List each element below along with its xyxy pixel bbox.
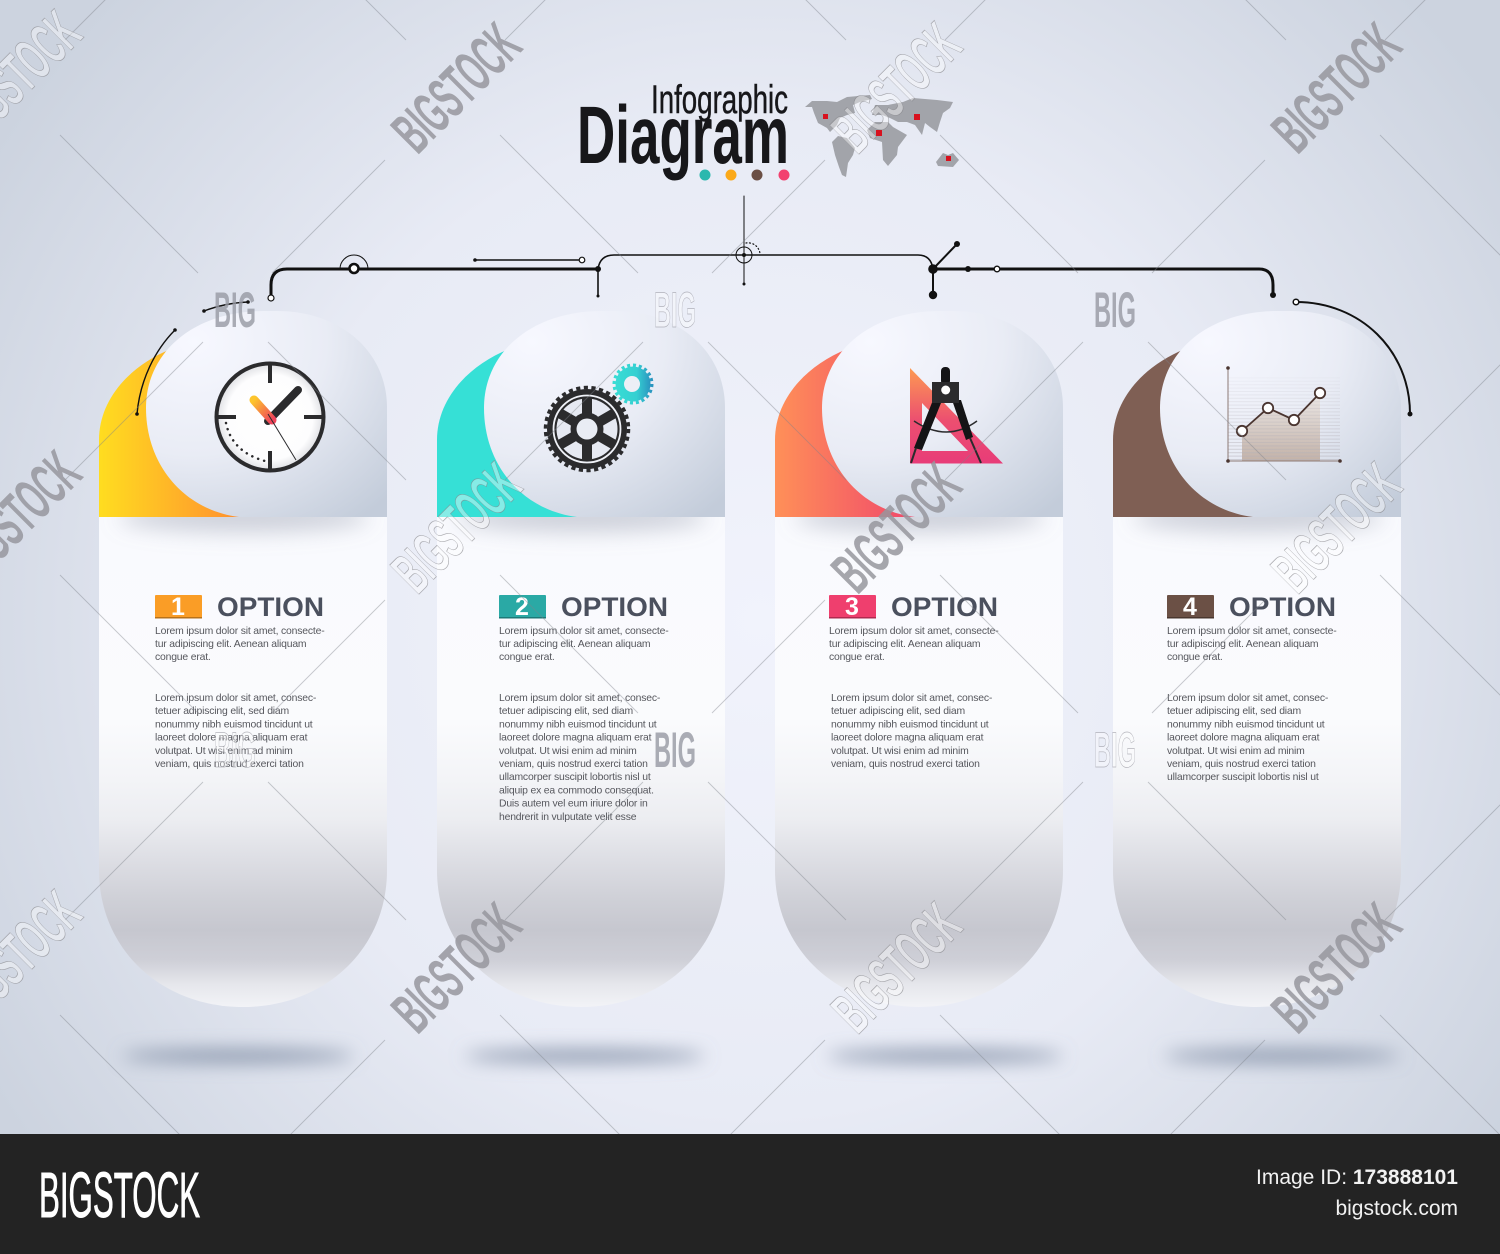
icon: set square and compass bbox=[910, 367, 1003, 464]
option 2 text: nonummy nibh euismod tincidunt ut bbox=[499, 719, 657, 730]
panel: option 3 bbox=[775, 311, 1063, 1007]
option 3 text: nonummy nibh euismod tincidunt ut bbox=[831, 719, 989, 730]
option 4 text: nonummy nibh euismod tincidunt ut bbox=[1167, 719, 1325, 730]
option 4 text: ullamcorper suscipit lobortis nisl ut bbox=[1167, 772, 1319, 783]
icon: clock bbox=[216, 364, 324, 470]
icon: gears bbox=[546, 366, 652, 470]
option 2 text: Lorem ipsum dolor sit amet, consec- bbox=[499, 693, 660, 704]
option 4 text: tetuer adipiscing elit, sed diam bbox=[1167, 706, 1301, 717]
title: Diagram bbox=[577, 90, 789, 181]
option 2 text: laoreet dolore magna aliquam erat bbox=[499, 733, 652, 744]
option 2 text: ullamcorper suscipit lobortis nisl ut bbox=[499, 772, 651, 783]
watermark text: BIG bbox=[214, 722, 256, 778]
option 1 text: Lorem ipsum dolor sit amet, consec- bbox=[155, 693, 316, 704]
footer band: bigstock.com bbox=[1335, 1197, 1458, 1220]
option 1 text: tur adipiscing elit. Aenean aliquam bbox=[155, 639, 306, 650]
option 2 text: tur adipiscing elit. Aenean aliquam bbox=[499, 639, 650, 650]
option 1 text: nonummy nibh euismod tincidunt ut bbox=[155, 719, 313, 730]
option 1 text bbox=[155, 592, 324, 770]
option 3 text: Lorem ipsum dolor sit amet, consecte- bbox=[829, 626, 998, 637]
panel: option 1 bbox=[99, 311, 387, 1007]
option 2 text: 2 bbox=[515, 593, 529, 621]
option 2 text: hendrerit in vulputate velit esse bbox=[499, 812, 637, 823]
option 1 text: veniam, quis nostrud exerci tation bbox=[155, 759, 304, 770]
watermark text bbox=[0, 0, 1413, 1045]
option 3 text: OPTION bbox=[891, 592, 998, 622]
option 1 text: OPTION bbox=[217, 592, 324, 622]
option 3 text: volutpat. Ut wisi enim ad minim bbox=[831, 746, 969, 757]
option 1 text: congue erat. bbox=[155, 652, 211, 663]
watermark text: BIGSTOCK bbox=[819, 451, 973, 605]
option 2 text bbox=[499, 592, 668, 823]
option 4 text: laoreet dolore magna aliquam erat bbox=[1167, 733, 1320, 744]
watermark text: BIG bbox=[1094, 722, 1136, 778]
option 1 text: laoreet dolore magna aliquam erat bbox=[155, 733, 308, 744]
option 2 text: Duis autem vel eum iriure dolor in bbox=[499, 799, 648, 810]
option 2 text: aliquip ex ea commodo consequat. bbox=[499, 785, 654, 796]
footer band: BIGSTOCK bbox=[39, 1159, 200, 1231]
watermark text: BIGSTOCK bbox=[379, 891, 533, 1045]
watermark text: BIGSTOCK bbox=[379, 451, 533, 605]
option 4 text: Lorem ipsum dolor sit amet, consec- bbox=[1167, 693, 1328, 704]
panel: option 4 bbox=[1113, 311, 1401, 1007]
option 1 text: Lorem ipsum dolor sit amet, consecte- bbox=[155, 626, 324, 637]
option 3 text: laoreet dolore magna aliquam erat bbox=[831, 733, 984, 744]
option 2 text: Lorem ipsum dolor sit amet, consecte- bbox=[499, 626, 668, 637]
watermark text: BIG bbox=[1094, 282, 1136, 338]
option 1 text: 1 bbox=[171, 593, 185, 621]
option 4 text: 4 bbox=[1183, 593, 1197, 621]
option 1 text: volutpat. Ut wisi enim ad minim bbox=[155, 746, 293, 757]
icon: line chart bbox=[1226, 366, 1342, 463]
option 2 text: volutpat. Ut wisi enim ad minim bbox=[499, 746, 637, 757]
icon: world map bbox=[805, 95, 959, 177]
watermark text: BIG bbox=[214, 282, 256, 338]
watermark text: BIG bbox=[654, 722, 696, 778]
option 3 text: congue erat. bbox=[829, 652, 885, 663]
option 2 text: veniam, quis nostrud exerci tation bbox=[499, 759, 648, 770]
footer band: Image ID: 173888101 bbox=[1256, 1166, 1458, 1189]
option 3 text bbox=[829, 592, 998, 770]
footer band bbox=[0, 1134, 1500, 1254]
panel: option 2 bbox=[437, 311, 725, 1007]
option 3 text: tur adipiscing elit. Aenean aliquam bbox=[829, 639, 980, 650]
option 4 text: Lorem ipsum dolor sit amet, consecte- bbox=[1167, 626, 1336, 637]
option 4 text: congue erat. bbox=[1167, 652, 1223, 663]
option 3 text: tetuer adipiscing elit, sed diam bbox=[831, 706, 965, 717]
floor shadows bbox=[122, 1050, 1400, 1062]
option 1 text: tetuer adipiscing elit, sed diam bbox=[155, 706, 289, 717]
option 4 text: veniam, quis nostrud exerci tation bbox=[1167, 759, 1316, 770]
title bbox=[577, 78, 789, 181]
option 3 text: 3 bbox=[845, 593, 859, 621]
title: Infographic bbox=[651, 78, 788, 122]
watermark text: BIG bbox=[654, 282, 696, 338]
option 3 text: Lorem ipsum dolor sit amet, consec- bbox=[831, 693, 992, 704]
option 2 text: congue erat. bbox=[499, 652, 555, 663]
title colour dots bbox=[700, 170, 790, 180]
option 4 text: tur adipiscing elit. Aenean aliquam bbox=[1167, 639, 1318, 650]
connector lines bbox=[135, 196, 1413, 416]
option 2 text: OPTION bbox=[561, 592, 668, 622]
option 4 text bbox=[1167, 592, 1336, 783]
option 3 text: veniam, quis nostrud exerci tation bbox=[831, 759, 980, 770]
option 4 text: volutpat. Ut wisi enim ad minim bbox=[1167, 746, 1305, 757]
watermark text: BIGSTOCK bbox=[819, 891, 973, 1045]
option 2 text: tetuer adipiscing elit, sed diam bbox=[499, 706, 633, 717]
option 4 text: OPTION bbox=[1229, 592, 1336, 622]
